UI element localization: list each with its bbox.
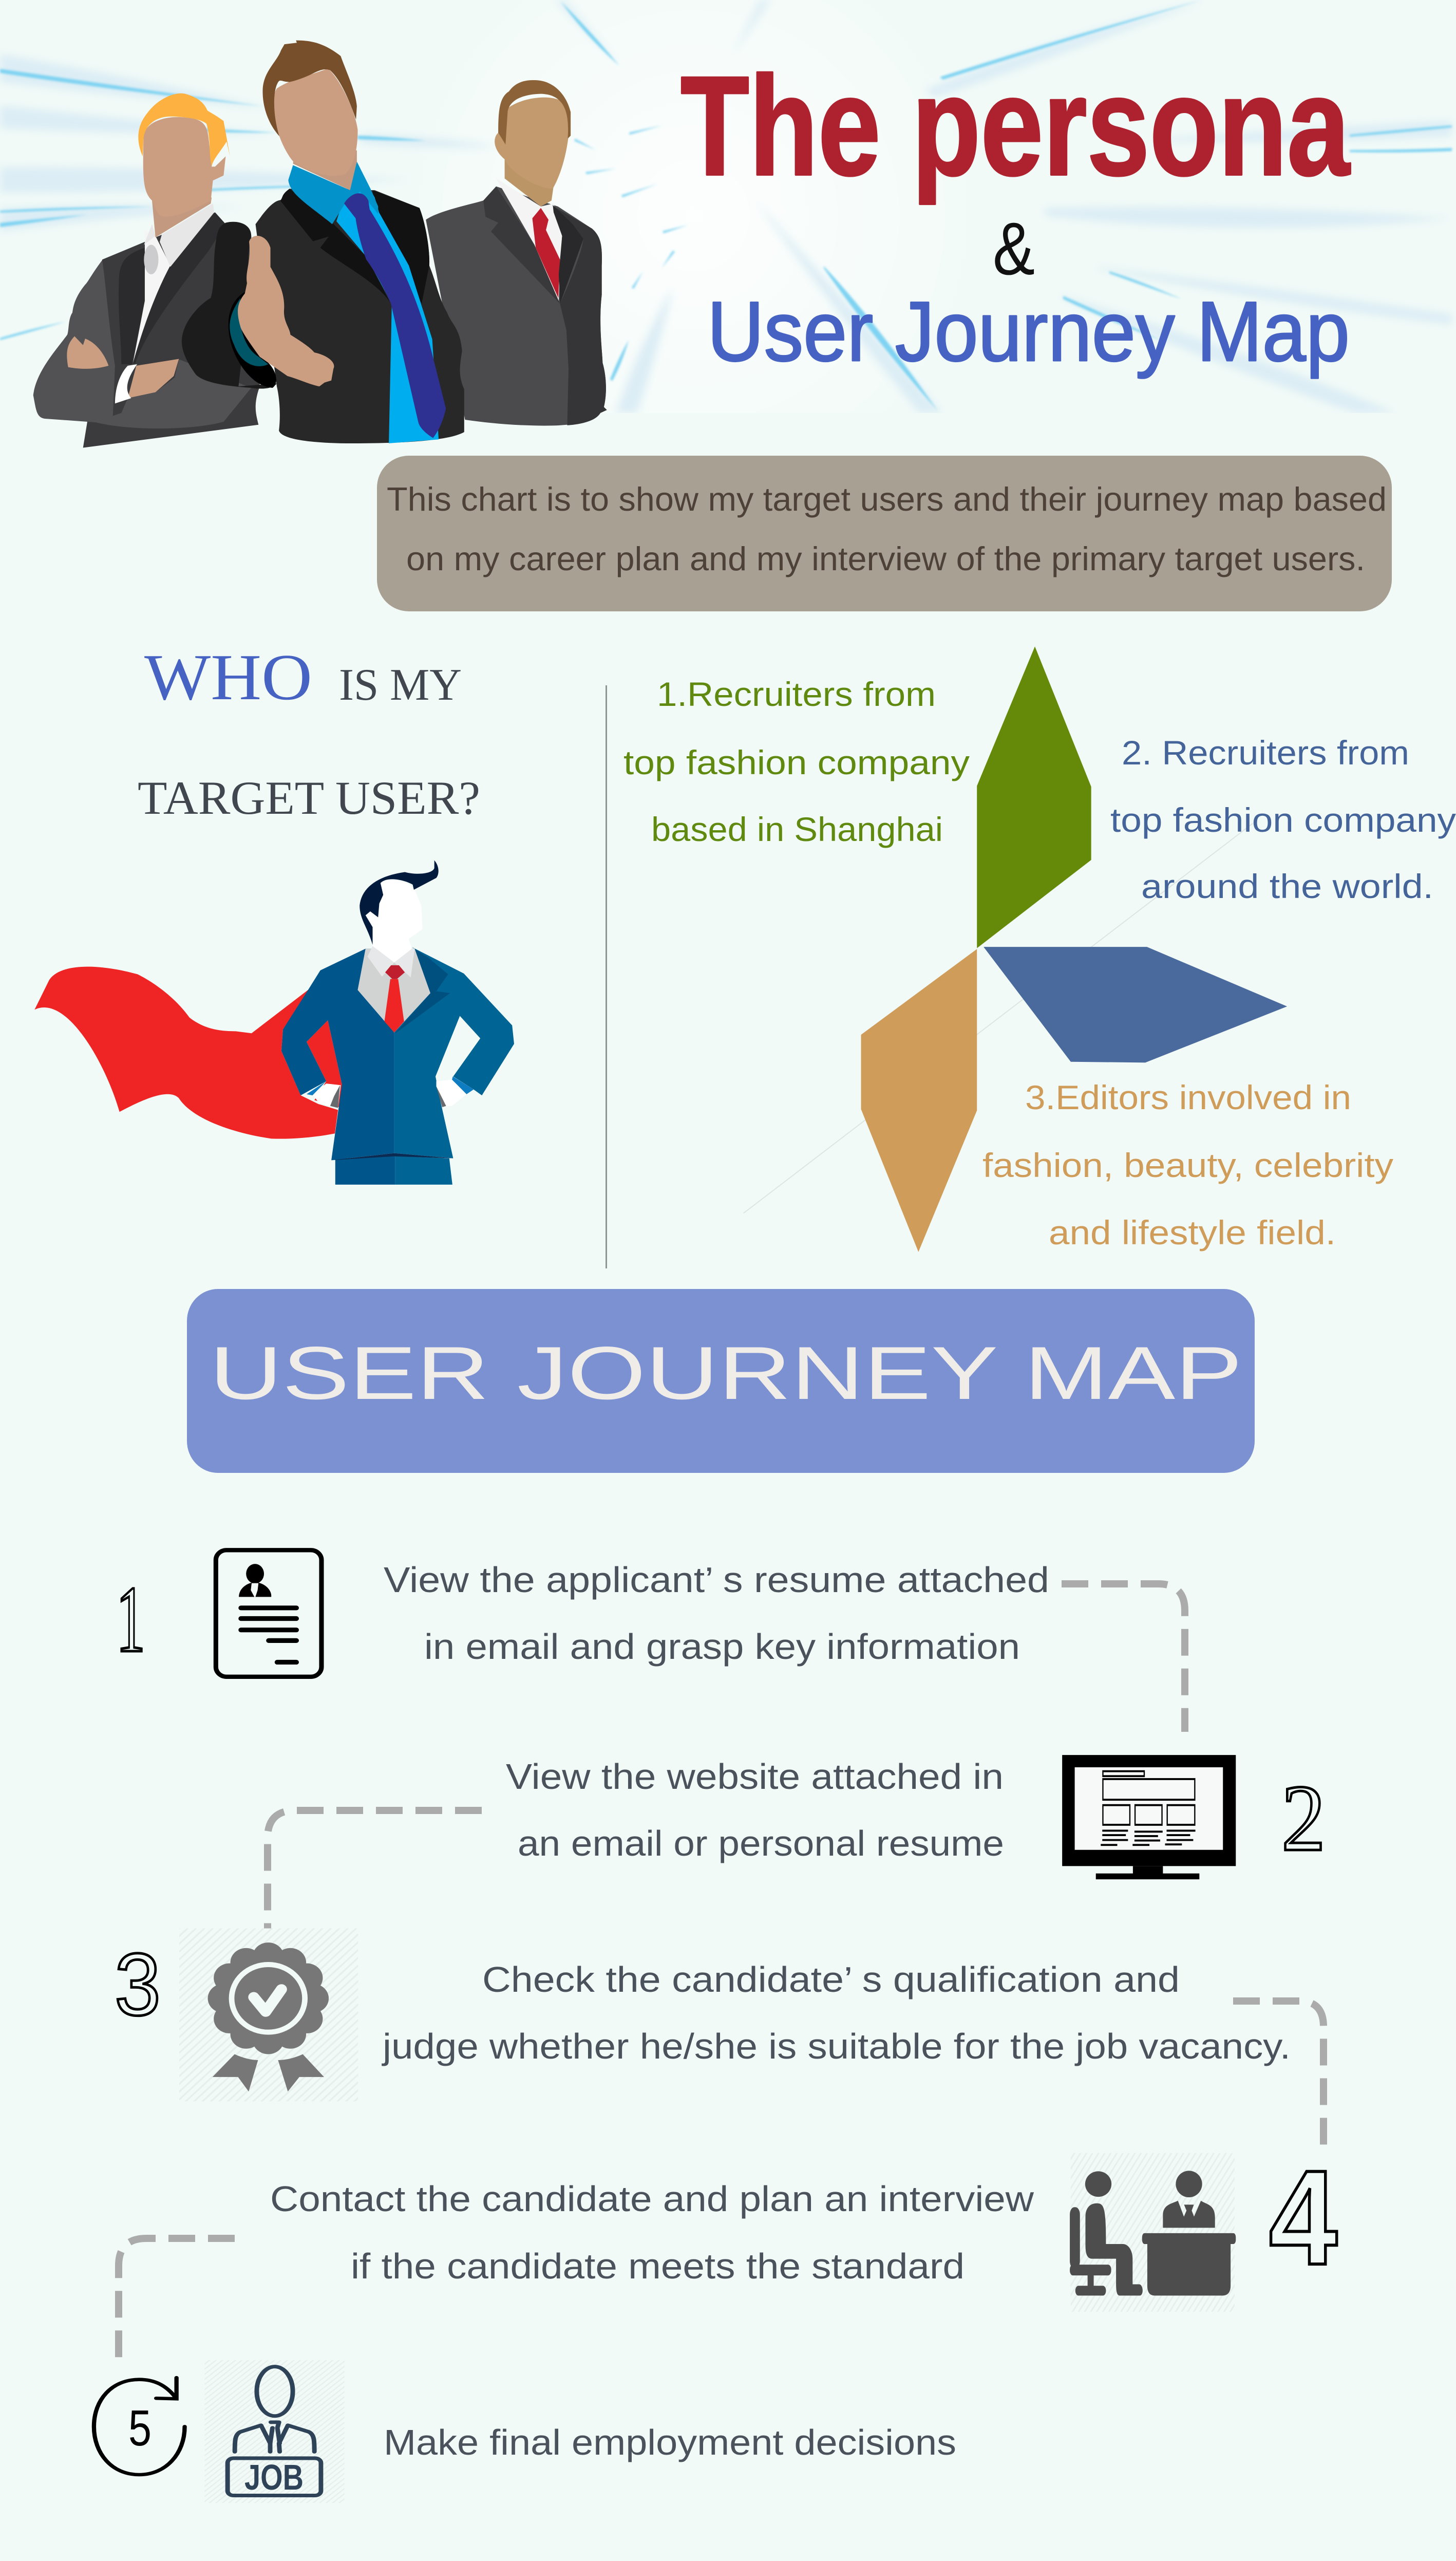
step 2 text	[506, 1756, 1004, 1863]
step 4 text: Contact the candidate and plan an interview	[270, 2179, 1034, 2219]
step 5 number with circular arrow	[94, 2378, 185, 2475]
digit 5: 5	[128, 2400, 152, 2456]
heading: who is my target user	[138, 641, 480, 824]
step 1 text	[384, 1560, 1049, 1667]
pinwheel blade: blue	[984, 947, 1287, 1062]
subtitle: User Journey Map: User Journey Map	[707, 284, 1350, 379]
icon: resume document	[216, 1550, 322, 1677]
step 3 number: 3	[115, 1935, 161, 2034]
ampersand: &	[993, 207, 1035, 290]
section banner: user journey map	[187, 1289, 1255, 1473]
pinwheel blade: tan	[861, 949, 977, 1252]
figure: centre man	[182, 41, 464, 443]
step 1 text: View the applicant’ s resume attached	[384, 1560, 1049, 1600]
step 5 text: Make final employment decisions	[384, 2422, 956, 2462]
step 2 text: View the website attached in	[506, 1756, 1004, 1797]
step 3 text: Check the candidate’ s qualification and	[482, 1959, 1180, 1999]
intro callout panel	[377, 456, 1392, 611]
icon: interview at desk	[1070, 2153, 1236, 2312]
heading words: TARGET USER?: TARGET USER?	[138, 772, 480, 824]
target user 1 text	[623, 675, 970, 848]
target user 2 text: around the world.	[1141, 867, 1433, 905]
target user 2 text: 2. Recruiters from	[1122, 734, 1409, 772]
header burst background	[0, 0, 1452, 413]
connector: step 1 to 2	[1062, 1584, 1185, 1732]
target user 3 text	[982, 1078, 1393, 1251]
intro text line 2: on my career plan and my interview of the primary target users.	[406, 540, 1365, 577]
step 1 text: in email and grasp key information	[424, 1627, 1020, 1667]
heading words: IS MY: IS MY	[339, 660, 462, 710]
icon: website monitor	[1062, 1755, 1236, 1879]
target user 1 text: 1.Recruiters from	[657, 675, 936, 713]
target user 3 text: 3.Editors involved in	[1025, 1078, 1351, 1116]
target user 2 text: top fashion company	[1110, 801, 1456, 839]
connector: step 2 to 3	[268, 1810, 482, 1944]
figure: right man	[426, 80, 607, 426]
heading word: WHO: WHO	[144, 641, 312, 714]
icon: job candidate	[204, 2360, 345, 2503]
target user 3 text: fashion, beauty, celebrity	[982, 1146, 1393, 1184]
step 4 number: 4	[1269, 2142, 1338, 2293]
target user 2 text	[1110, 734, 1456, 905]
step 3 text: judge whether he/she is suitable for the job vacancy.	[382, 2026, 1291, 2066]
job sign text: JOB	[244, 2457, 304, 2497]
figure: left man	[33, 94, 260, 447]
step 3 text	[382, 1959, 1291, 2066]
section banner title: USER JOURNEY MAP	[210, 1331, 1242, 1415]
diagram: target user pinwheel	[744, 646, 1287, 1252]
icon: award rosette	[179, 1929, 358, 2101]
connector: step 4 to 5	[119, 2238, 235, 2367]
illustration: superhero businessman	[34, 860, 514, 1185]
illustration: three businessmen	[33, 41, 607, 447]
connector: step 3 to 4	[1233, 2001, 1323, 2145]
step 2 text: an email or personal resume	[518, 1823, 1004, 1863]
target user 1 text: based in Shanghai	[651, 810, 943, 848]
step 2 number: 2	[1281, 1766, 1326, 1871]
target user 1 text: top fashion company	[623, 743, 970, 781]
step 4 text: if the candidate meets the standard	[351, 2246, 965, 2286]
intro text line 1: This chart is to show my target users and their journey map based	[387, 480, 1387, 518]
target user 3 text: and lifestyle field.	[1049, 1213, 1336, 1251]
step 1 number: 1	[116, 1567, 145, 1672]
pinwheel blade: green	[977, 646, 1091, 948]
step 4 text	[270, 2179, 1034, 2286]
